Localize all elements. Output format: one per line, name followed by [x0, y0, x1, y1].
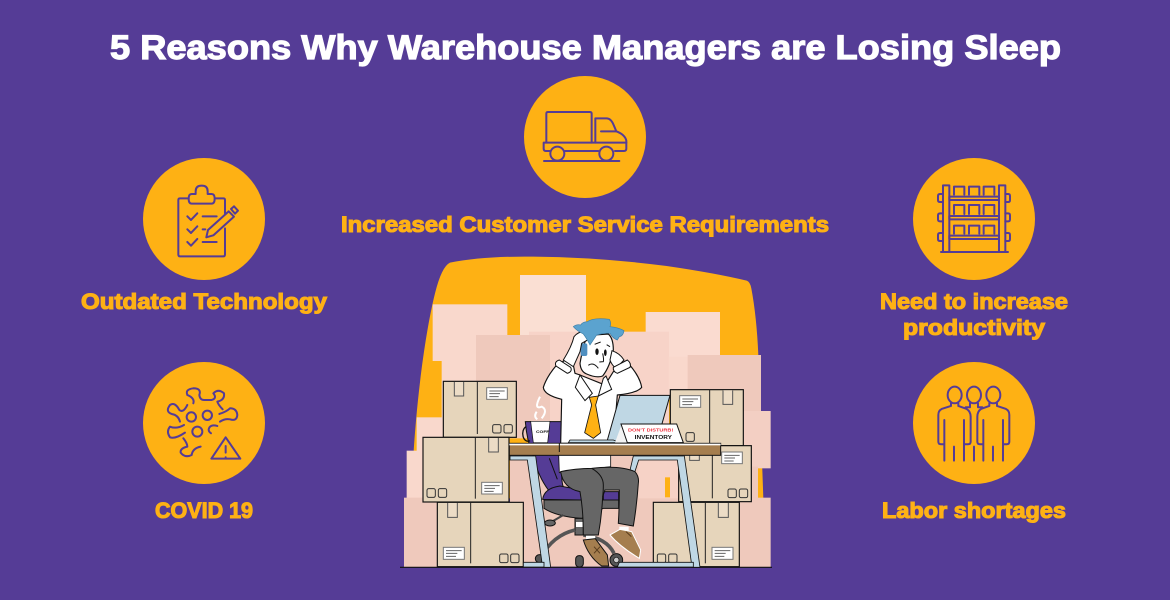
- tie: [585, 396, 601, 438]
- label: Need to increase: [880, 289, 1068, 314]
- icon: virus and warning triangle: [168, 388, 240, 459]
- cardboard boxes right: [653, 390, 751, 567]
- reason: increased customer service requirements: [341, 76, 829, 237]
- label: Labor shortages: [882, 498, 1066, 523]
- label: Increased Customer Service Requirements: [341, 212, 829, 237]
- office chair: [525, 422, 623, 567]
- icon: clipboard and pencil: [178, 186, 238, 256]
- reason: outdated technology: [81, 158, 328, 314]
- desk sign: [615, 424, 683, 443]
- face: [580, 334, 613, 377]
- phone: [581, 343, 587, 356]
- label: productivity: [903, 315, 1046, 340]
- coffee mug with steam: [523, 397, 550, 443]
- hair: [573, 319, 624, 345]
- label: [880, 289, 1068, 340]
- trousers and shoes: [561, 467, 641, 566]
- coffee mug with steam: COFF: [536, 429, 550, 434]
- desk sign: DON'T DISTURB!: [628, 427, 674, 433]
- reason: need to increase productivity: [880, 158, 1068, 340]
- background city blocks: [404, 275, 771, 567]
- desk top: [509, 443, 721, 455]
- right hand: [610, 351, 624, 368]
- desk sign: INVENTORY: [635, 435, 673, 441]
- icon: delivery truck: [544, 112, 626, 161]
- reason: covid 19: [143, 362, 265, 523]
- reason: labor shortages: [882, 362, 1066, 523]
- lower shirt: [559, 454, 611, 473]
- facial features: [588, 342, 610, 368]
- cardboard boxes left: [423, 381, 523, 567]
- title: 5 Reasons Why Warehouse Managers are Losing Sleep: [110, 29, 1061, 67]
- icon: warehouse shelves: [938, 185, 1010, 252]
- illustration: stressed manager at desk among boxes: [400, 257, 772, 567]
- floor line: [400, 566, 772, 569]
- manager torso and head: [543, 319, 642, 443]
- shirt: [543, 357, 642, 443]
- collar: [575, 375, 592, 401]
- left hand: [563, 332, 591, 367]
- background blob: [413, 257, 763, 498]
- icon: three workers: [938, 387, 1009, 461]
- label: Outdated Technology: [81, 289, 328, 314]
- laptop: [568, 395, 670, 443]
- label: COVID 19: [155, 498, 253, 523]
- desk legs: [510, 456, 700, 567]
- cuffs: [555, 360, 571, 373]
